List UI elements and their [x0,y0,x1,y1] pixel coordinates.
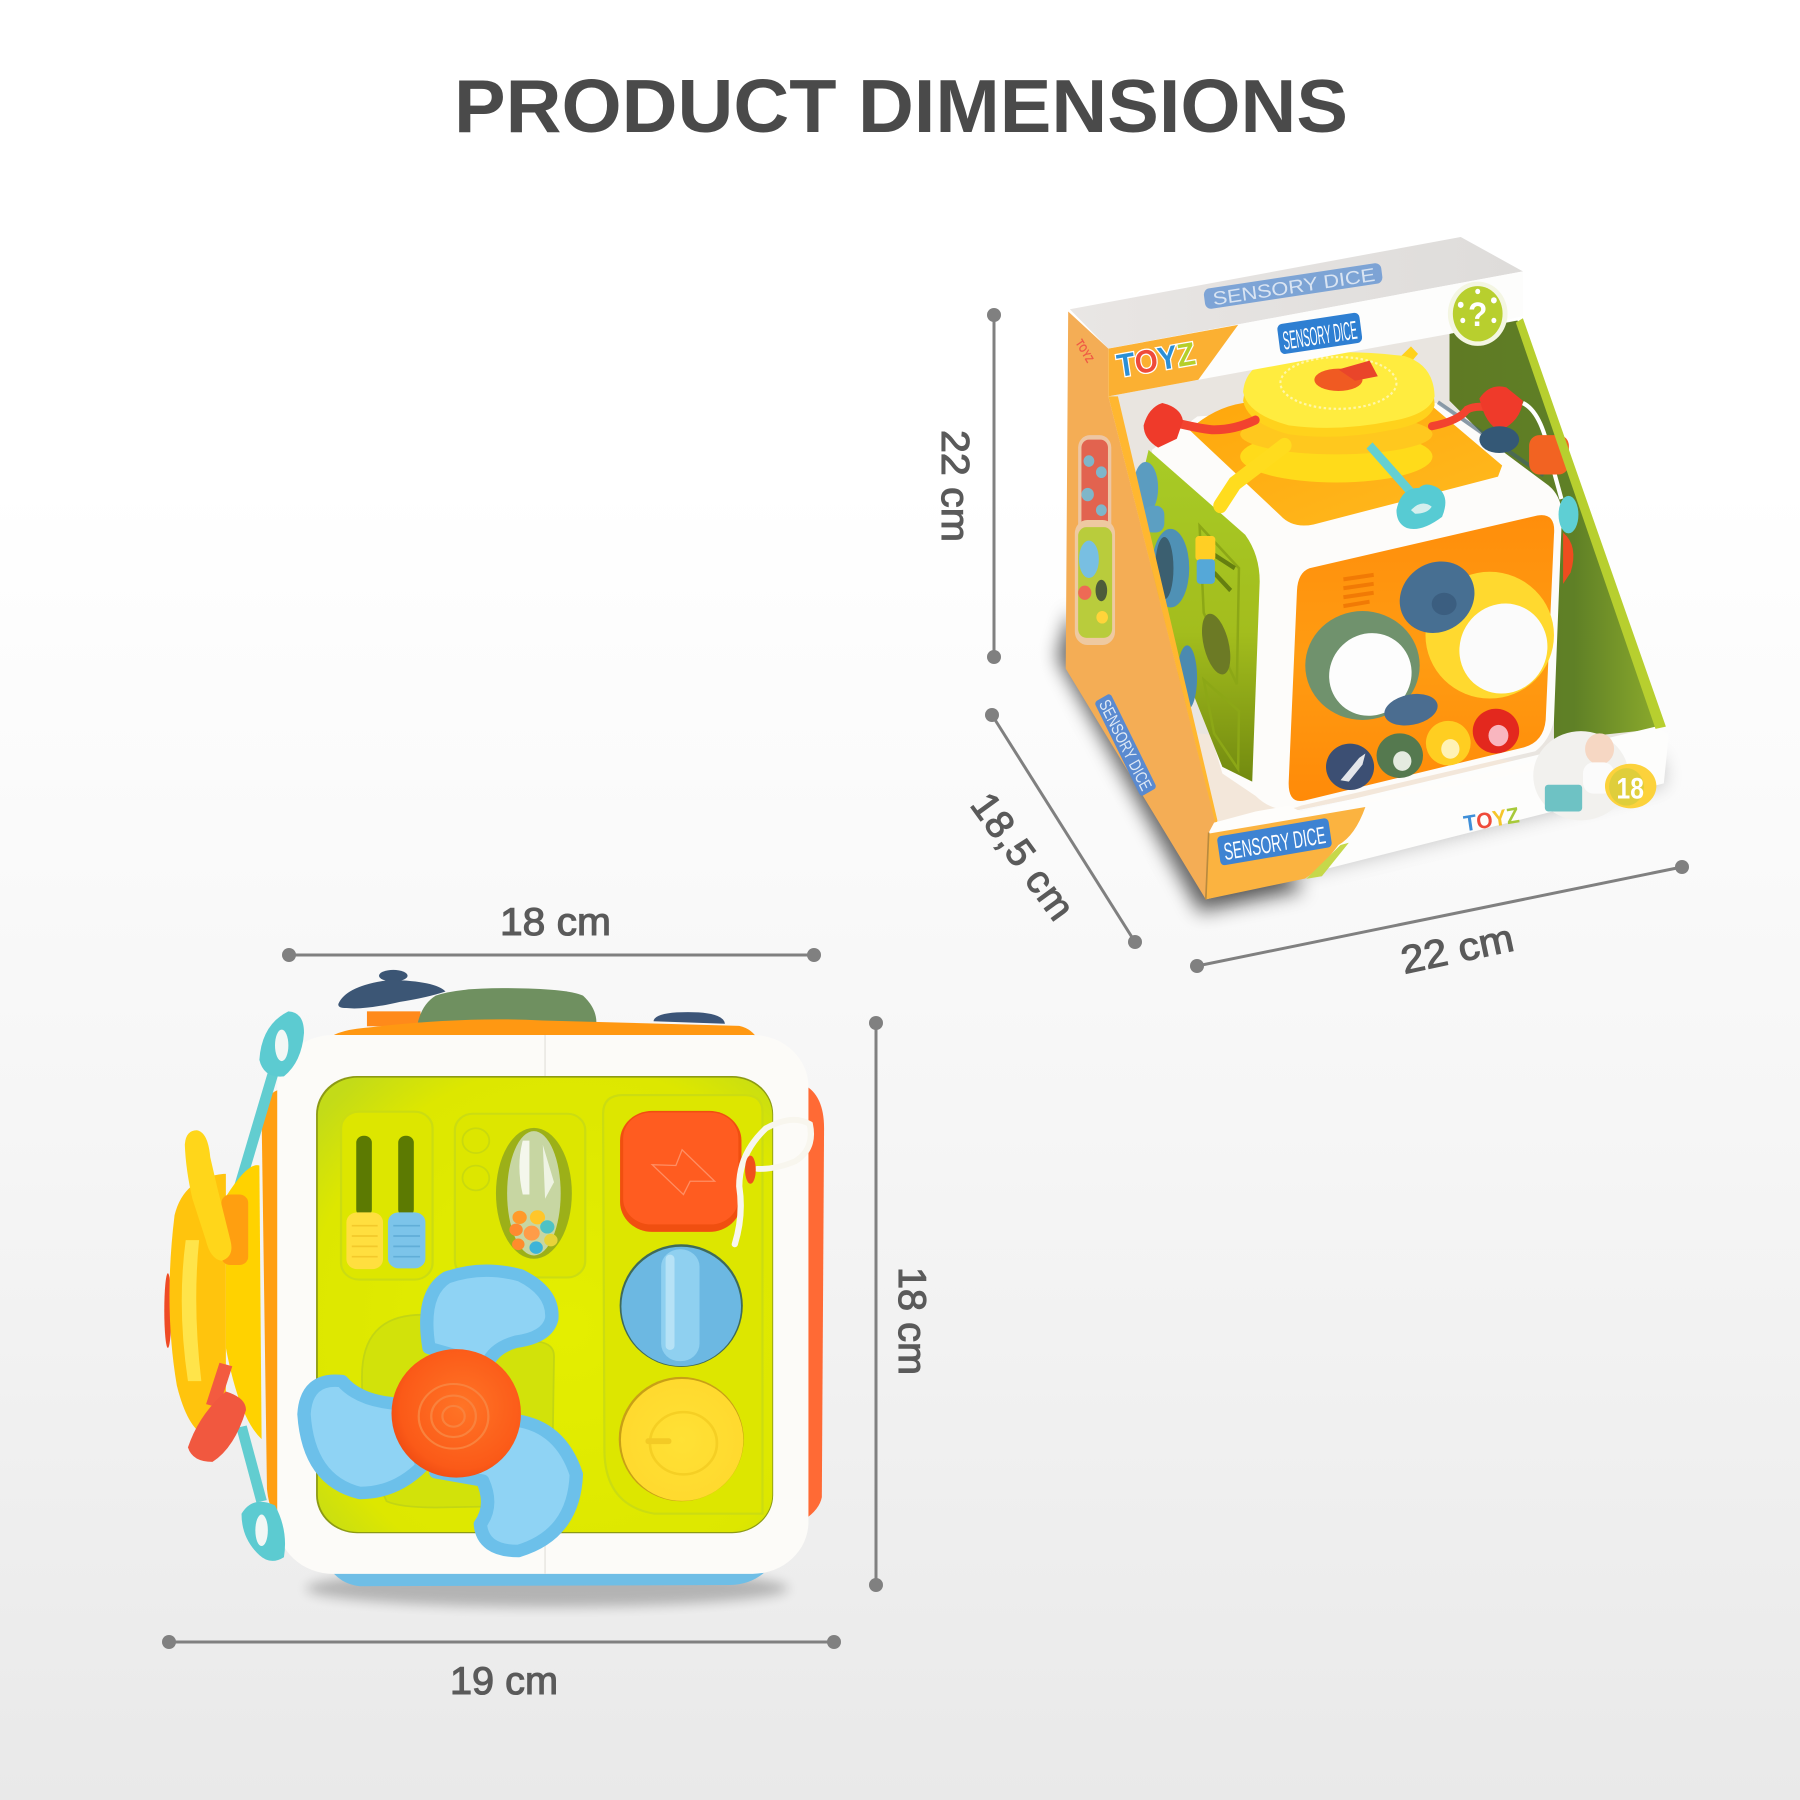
title: PRODUCT DIMENSIONS [454,64,1348,148]
box lid [1070,237,1523,349]
side sensory dice: SENSORY DICE [1095,696,1156,794]
yellow handle top [1396,346,1418,370]
bottom lime accent [1306,843,1349,879]
logo TOYZ: TOYZ [1115,335,1198,384]
side inset squares [1200,526,1239,769]
split line [544,1035,547,1574]
cube product [164,970,824,1607]
box floor [1198,733,1533,827]
bottom orange corner [1206,807,1365,899]
cube left lime face [1139,450,1260,782]
side sensory dice [1094,693,1157,797]
boxed product [1057,237,1669,912]
dimension: box depth 18,5 cm: 18,5 cm [962,785,1082,928]
age badge: 18 [1617,773,1644,806]
label sensory dice band [1203,262,1383,311]
dimension: cube width 19 cm [162,1635,841,1703]
blue base [329,1563,773,1586]
bottom sensory dice [1217,818,1332,866]
baby photo [1533,731,1629,820]
boxed product: SENSORY DICE [1281,316,1359,356]
side mini logo: TOYZ [1073,337,1097,366]
dimension: cube top 18 cm: 18 cm [500,901,611,944]
dial base [1240,431,1433,482]
red side piece [1563,532,1573,584]
badge lime [1448,282,1508,346]
yellow drum [1425,572,1559,707]
box shadow left [1057,613,1305,912]
yellow slider [346,1212,383,1269]
side picture 2 [1075,520,1115,645]
navy knob [1390,550,1485,645]
dimension: box width 22 cm: 22 cm [1397,917,1518,983]
corner fold [1206,832,1209,899]
box shadow right [1214,756,1666,896]
dial stem [1240,414,1433,454]
teal bead [1559,496,1578,533]
lime panel [318,1078,772,1532]
dial plate [1243,352,1435,428]
dimension: box height 22 cm: 22 cm [933,430,976,542]
dimension: box height 22 cm [933,308,1001,664]
label sensory dice centre [1277,312,1363,356]
navy mushroom [338,970,446,1026]
orange hub [221,1195,248,1265]
white rope [735,1120,811,1244]
navy button top [654,1012,725,1024]
fan hub [392,1349,521,1478]
rattle window [496,1128,572,1259]
dark peg [1479,426,1519,453]
small slider [1382,690,1440,730]
box side cut rim [1108,396,1217,826]
left orange strip [262,1088,286,1525]
badge lime: ? [1468,295,1487,333]
age badge [1605,764,1656,808]
dimension: cube top 18 cm [282,901,821,962]
bottom sensory dice: SENSORY DICE [1222,821,1327,865]
blue slider [388,1212,425,1268]
dimension: cube height 18 cm: 18 cm [890,1267,933,1375]
yellow button [619,1377,744,1501]
side vent slots [1214,555,1235,591]
front bottom panel [1206,727,1669,899]
yellow wheel right [226,1165,262,1439]
cube shadow [306,1570,788,1607]
teal strap bottom [242,1427,285,1561]
bottom logo TOYZ: TOYZ [1462,803,1521,837]
yellow stick [1220,445,1285,506]
green drum [1305,611,1420,726]
red strap right [1432,386,1523,431]
teal strap top [237,1011,304,1195]
band orange corner [1108,325,1238,396]
whistle [1314,361,1378,391]
dimension: cube width 19 cm: 19 cm [450,1660,558,1703]
rattle panel [455,1114,585,1277]
box interior [1108,320,1658,827]
dial plate rim [1243,361,1435,437]
yellow wheel highlight [182,1240,201,1381]
right column panel [603,1095,762,1514]
side picture 1 [1078,435,1111,538]
orange bead [1529,435,1569,474]
label sensory dice band: SENSORY DICE [1211,264,1376,309]
dimension: box width 22 cm [1190,860,1689,983]
red side sliver [164,1273,171,1348]
right lime rim [1516,318,1666,729]
side blue knobs [1133,462,1197,710]
top orange edge [325,1019,759,1042]
white body [277,1035,808,1574]
red key [188,1364,246,1462]
red knot [745,1156,756,1184]
button rocket [1326,744,1374,790]
box front band [1108,271,1523,396]
dial ticks [1280,357,1396,409]
green drum top [418,988,596,1023]
button smile [1426,721,1471,766]
blue knob [620,1244,743,1367]
box left side panel [1066,312,1216,899]
dimension: box depth 18,5 cm [962,708,1142,949]
cube body [1152,403,1562,809]
white wire [1523,403,1561,499]
speaker vents [1343,575,1374,606]
slider slots [356,1136,414,1217]
insert card strip [1438,402,1544,475]
button astronaut [1377,733,1423,778]
teal stick [1370,445,1411,492]
teal heart [1396,484,1445,529]
side sliders [1195,536,1215,584]
yellow wheel left [169,1174,226,1439]
right orange side [804,1085,824,1520]
lime panel edge [316,1076,773,1533]
red square button [620,1111,741,1232]
yellow stick [185,1130,231,1261]
dimension: cube height 18 cm [869,1016,933,1592]
cube top orange panel [1189,403,1502,526]
bottom front lip [1208,762,1535,834]
small circles [462,1128,489,1190]
side rattle [1197,610,1236,678]
slider panel [341,1112,433,1280]
lower centre inset [362,1315,554,1508]
button animal [1473,709,1519,753]
fan blades [304,1271,576,1551]
box back green wall [1450,320,1658,740]
red strap left [1144,403,1256,448]
front orange panel [1289,515,1554,801]
